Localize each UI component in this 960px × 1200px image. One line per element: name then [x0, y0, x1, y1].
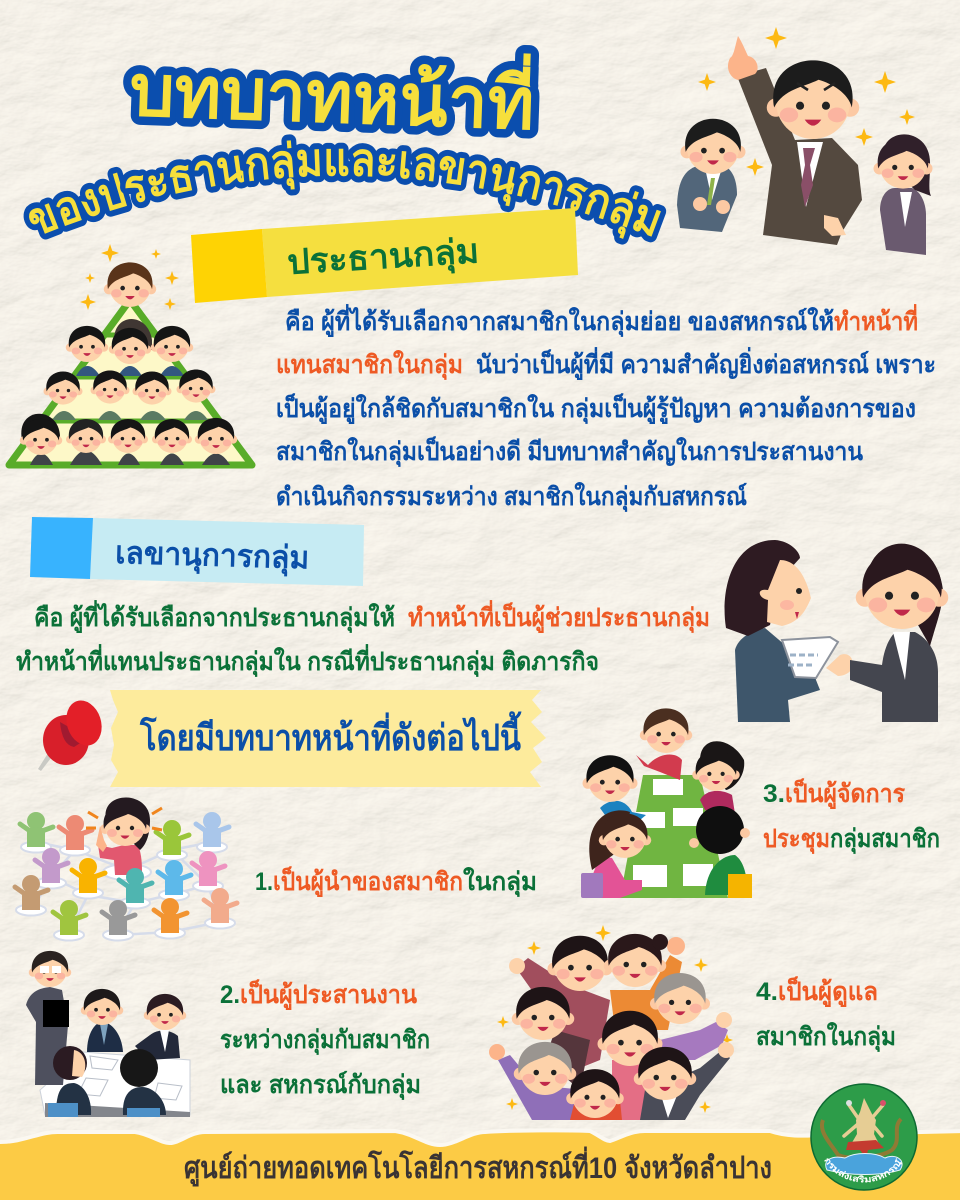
banner: torn tape: โดยมีบทบาทหน้าที่ดังต่อไปนี้: [139, 711, 522, 758]
text: item 3: 3.: [763, 780, 785, 808]
text block: secretary definition: คือ ผู้ที่ได้รับเลือกจากประธานกลุ่มให้: [34, 600, 395, 634]
heading: เลขานุการกลุ่ม: เลขานุการกลุ่ม: [115, 535, 310, 577]
text block: secretary definition: [16, 600, 710, 678]
logo: cooperative department emblem: [810, 1083, 918, 1191]
text block: chairman definition: [276, 304, 936, 513]
text: item 1: [255, 866, 537, 898]
text: item 2: 2.: [220, 981, 240, 1009]
footer band: ศูนย์ถ่ายทอดเทคโนโลยีการสหกรณ์ที่10 จังหวัดลำปาง: [184, 1146, 772, 1187]
text: item 1: 1.: [255, 868, 273, 896]
text: item 2: ระหว่างกลุ่มกับสมาชิก: [220, 1026, 430, 1056]
text: item 3: กลุ่มสมาชิก: [830, 825, 940, 855]
icon: red push pin: [38, 696, 107, 771]
text: item 2: และ สหกรณ์กับกลุ่ม: [220, 1070, 421, 1101]
text: item 4: เป็นผู้ดูแล: [778, 976, 878, 1008]
logo: cooperative department emblem: กรมส่งเสริมสหกรณ์: [824, 1158, 902, 1182]
text block: chairman definition: ดำเนินกิจกรรมระหว่าง สมาชิกในกลุ่มกับสหกรณ์: [276, 481, 747, 513]
illustration: two women with papers: [725, 540, 948, 722]
text block: chairman definition: คือ ผู้ที่ได้รับเลือกจากสมาชิกในกลุ่มย่อย ของสหกรณ์ให้: [285, 304, 834, 338]
text: item 3: [763, 778, 940, 855]
text block: chairman definition: สมาชิกในกลุ่มเป็นอย่างดี มีบทบาทสำคัญในการประสานงาน: [276, 436, 863, 468]
heading: เลขานุการกลุ่ม: [30, 517, 364, 586]
text: item 2: เป็นผู้ประสานงาน: [240, 979, 417, 1011]
illustration: cheering crowd: [489, 925, 734, 1120]
text: item 4: 4.: [756, 978, 778, 1006]
heading: ประธานกลุ่ม: ประธานกลุ่ม: [286, 232, 480, 284]
title: [24, 39, 666, 245]
illustration: pyramid of members: [9, 244, 252, 465]
text: item 1: เป็นผู้นำของสมาชิก: [273, 866, 463, 898]
text: item 4: สมาชิกในกลุ่ม: [756, 1021, 896, 1053]
text: item 3: ประชุม: [763, 825, 830, 855]
text block: secretary definition: ทำหน้าที่เป็นผู้ช่วยประธานกลุ่ม: [408, 600, 710, 634]
footer band: [0, 1130, 960, 1200]
text block: chairman definition: แทนสมาชิกในกลุ่ม: [276, 349, 463, 381]
banner: torn tape: [110, 690, 546, 787]
title line 2: ของประธานกลุ่มและเลขานุการกลุ่ม: [24, 134, 666, 245]
text: item 1: ในกลุ่ม: [463, 866, 537, 898]
text: item 3: เป็นผู้จัดการ: [785, 778, 906, 810]
illustration: meeting at table: [26, 951, 190, 1117]
text: item 2: [220, 979, 430, 1101]
illustration: leader in network: [15, 798, 237, 940]
illustration: group at green table: [581, 708, 752, 898]
text block: chairman definition: เป็นผู้อยู่ใกล้ชิดกับสมาชิกใน กลุ่มเป็นผู้รู้ปัญหา ความต้องการของ: [276, 393, 916, 425]
text block: secretary definition: ทำหน้าที่แทนประธานกลุ่มใน กรณีที่ประธานกลุ่ม ติดภารกิจ: [16, 644, 599, 678]
text block: chairman definition: ทำหน้าที่: [834, 304, 918, 336]
heading: ประธานกลุ่ม: [191, 208, 578, 303]
illustration: leader and colleagues: [677, 27, 932, 255]
text: item 4: [756, 976, 896, 1053]
title line 1: บทบาทหน้าที่: [128, 39, 536, 145]
